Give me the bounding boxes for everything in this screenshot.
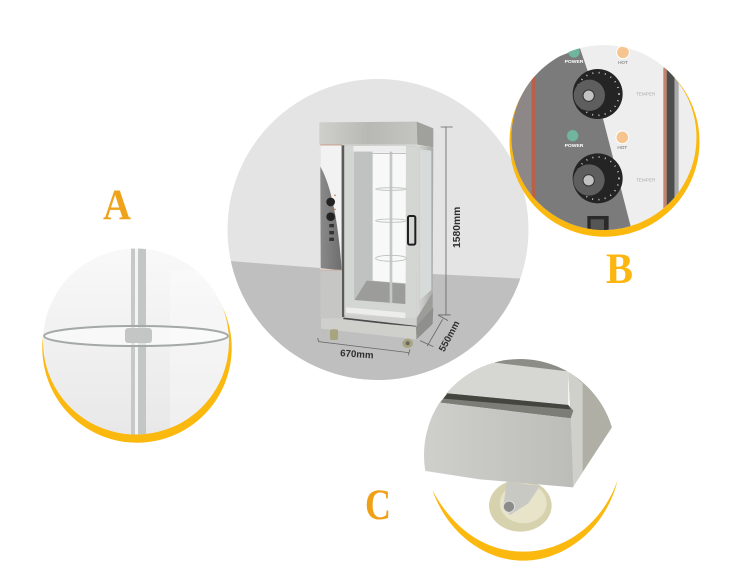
letter C: C [365,482,391,529]
panel labels: POWER [565,59,584,65]
oven hood [319,122,433,147]
door handle [408,216,415,245]
main circle: oven product photo [228,79,528,380]
panel labels: HOT [618,60,628,65]
panel background [507,40,700,237]
dimension: width: 670mm [340,348,374,361]
steel base front [423,403,573,487]
panel labels [565,59,656,183]
circle C: castor detail [423,350,623,561]
dimension: width [318,338,410,361]
letter A: A [103,182,131,229]
detail photo [507,40,700,237]
dial top [573,69,623,119]
oven base [321,307,433,339]
panel labels: POWER [565,143,584,149]
letter B: B [606,246,633,293]
yellow crescent [510,47,700,237]
grey panel [507,48,633,237]
dimension: height: 1580mm [452,207,463,248]
oven side [417,145,433,339]
control panel [320,145,343,318]
rocker switch [587,216,609,230]
top dark strip [495,359,568,372]
right trim [663,68,679,211]
upper steel panel [440,358,568,405]
panel labels: TEMPER [636,178,656,183]
yellow crescent [42,253,232,443]
castor wheel [489,480,552,532]
panel labels: TEMPER [636,91,656,96]
detail photo [40,245,230,438]
dimension: depth [420,315,462,354]
circle background: wall and floor [228,79,528,380]
door glass [354,152,406,304]
door frame [342,145,417,318]
panel labels: HOT [617,145,627,150]
castors [330,329,413,348]
circle A: rotisserie rack detail [40,245,232,443]
yellow crescent [432,480,618,561]
circle B: control panel detail [507,40,700,237]
steel base side [568,372,612,486]
oven body front [320,145,417,327]
dimension: depth: 550mm [437,319,462,354]
dial bottom [573,153,623,203]
lamps [567,46,629,144]
dimension: height [439,127,463,315]
steel housing clipped to circle [424,359,612,488]
oven [318,122,463,361]
seam band [440,393,573,418]
